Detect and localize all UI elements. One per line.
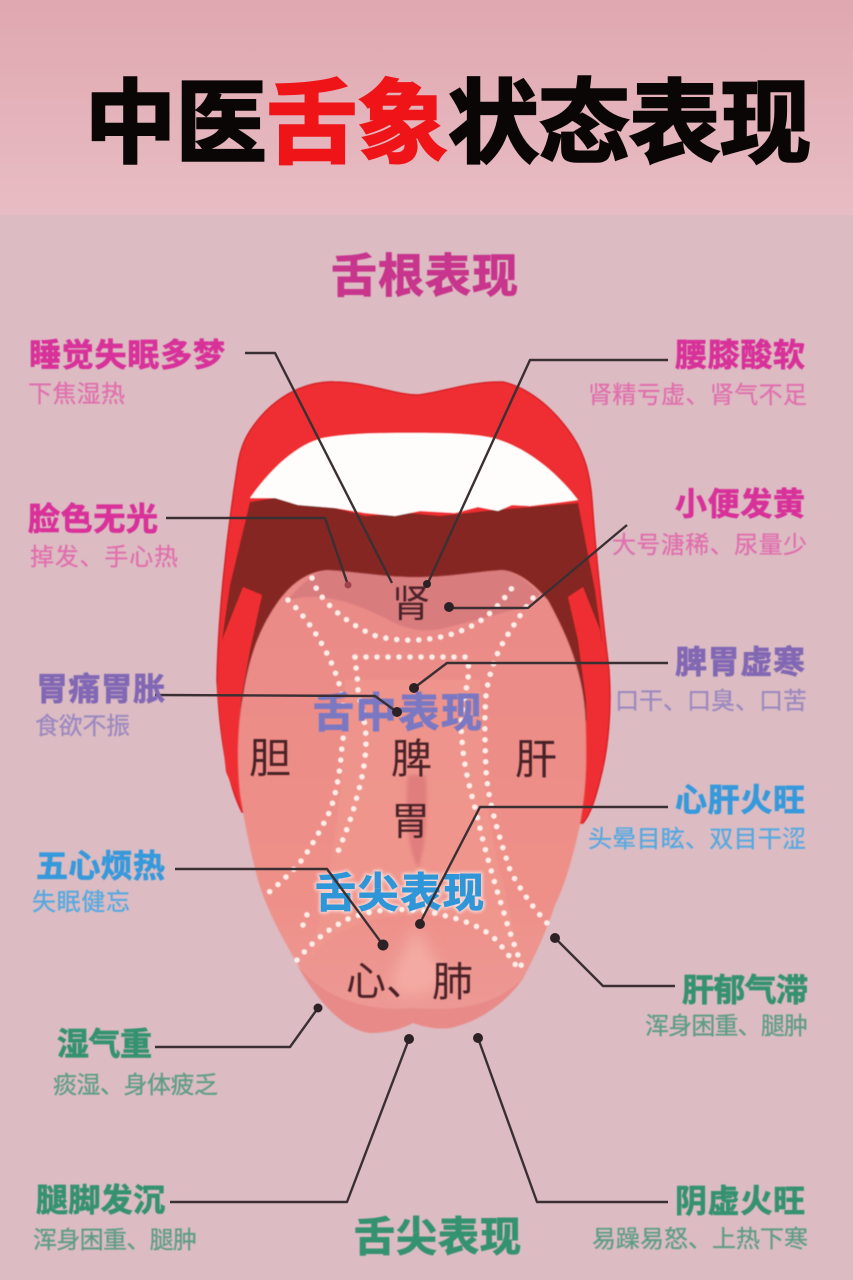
title: 中医舌象状态表现 [85,74,811,175]
leader: complexion [166,518,352,588]
inner lip strip left [217,587,262,812]
left labels [28,337,225,1254]
mouth interior [222,498,602,740]
label: liver qi stagnation: 肝郁气滞 [682,972,808,1008]
label: spleen and stomach cold: 口干、口臭、口苦 [615,688,807,715]
leader: five-centre heat [175,869,388,950]
central groove [406,775,427,868]
label: heavy legs [33,1182,197,1254]
label: liver qi stagnation [645,972,808,1040]
tip highlight [392,925,445,995]
leader: spleen and stomach cold [409,663,668,693]
label: five-centre heat: 失眠健忘 [32,889,130,916]
label: heavy damp [53,1026,218,1099]
organ label: liver: 肝 [515,736,557,783]
organ label: lung: 肺 [432,959,473,1005]
right labels [588,337,808,1253]
organ label: stomach: 胃 [391,801,430,844]
label: yin deficiency: 易躁易怒、上热下寒 [592,1226,808,1253]
label: urine: 小便发黄 [675,486,805,522]
heading: tongue tip (blue): 舌尖表现 [315,870,484,916]
leader: waist and knees [423,360,668,588]
label: yin deficiency: 阴虚火旺 [675,1183,805,1219]
label: sleep: 睡觉失眠多梦 [29,337,225,373]
label: heavy legs: 腿脚发沉 [36,1182,165,1218]
label: five-centre heat: 五心烦热 [36,848,165,884]
leader lines and dots [155,353,675,1202]
heading: tongue tip (bottom): 舌尖表现 [354,1214,521,1260]
label: stomach ache: 食欲不振 [35,713,130,740]
organ label: spleen: 脾 [391,736,432,782]
inner lip strip right [568,587,609,825]
label: complexion: 脸色无光 [28,501,158,537]
label: sleep [28,337,225,408]
label: heart and liver fire [588,782,806,853]
illustration: open mouth and tongue [217,382,610,1033]
label: spleen and stomach cold [615,644,807,715]
leader: liver qi stagnation [550,933,675,986]
label: waist and knees [588,337,807,409]
heading: tongue middle: 舌中表现 [313,690,482,736]
label: stomach ache [35,671,165,740]
label: yin deficiency [592,1183,808,1253]
label: heavy damp: 湿气重 [57,1026,152,1062]
label: heart and liver fire: 心肝火旺 [675,782,805,818]
organ label: gallbladder: 胆 [249,735,291,782]
tongue body [238,570,586,1033]
label: stomach ache: 胃痛胃胀 [36,671,165,707]
leader: heart and liver fire [415,807,668,929]
label: complexion [28,501,178,571]
leader: urine [444,525,627,612]
title banner [0,0,853,215]
lips [217,382,610,825]
heading: tongue tip (blue): 舌尖表现 [315,870,484,916]
label: heart and liver fire: 头晕目眩、双目干涩 [588,826,806,853]
label: sleep: 下焦湿热 [28,381,125,408]
label: urine: 大号溏稀、尿量少 [612,532,807,559]
centre panel shading [310,680,520,960]
label: spleen and stomach cold: 脾胃虚寒 [675,644,805,680]
heading: tongue root: 舌根表现 [331,250,518,302]
leader: stomach ache [155,695,402,717]
label: five-centre heat [32,848,165,916]
leader: yin deficiency [473,1033,668,1202]
organ label: heart: 心、 [346,960,426,1004]
label: heavy damp: 痰湿、身体疲乏 [53,1072,218,1099]
label: waist and knees: 肾精亏虚、肾气不足 [588,382,807,409]
label: liver qi stagnation: 浑身困重、腿肿 [645,1013,808,1040]
tip edge band [297,965,525,1033]
label: waist and knees: 腰膝酸软 [675,337,805,373]
leader: sleep [245,353,392,583]
tongue back region [288,570,540,630]
label: urine [612,486,807,559]
teeth [250,433,578,516]
label: heavy legs: 浑身困重、腿肿 [33,1227,197,1254]
leader: heavy damp [155,1004,322,1047]
organ label: kidney: 肾 [392,584,430,626]
dotted zone lines [268,578,547,968]
label: complexion: 掉发、手心热 [30,544,178,571]
leader: heavy legs [170,1034,414,1202]
